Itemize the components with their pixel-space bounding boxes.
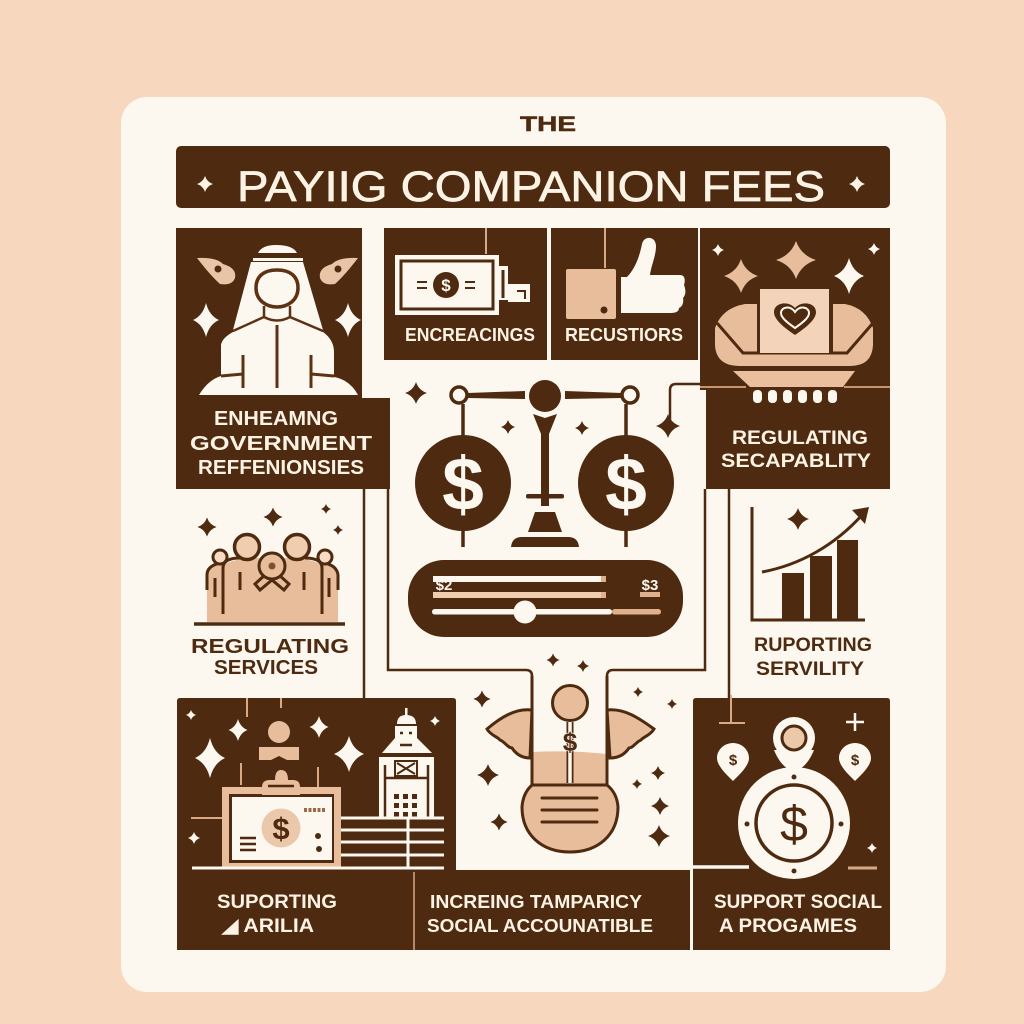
icon: coin target pin: $ bbox=[729, 752, 738, 769]
icon: sparkles above group bbox=[198, 504, 343, 536]
chart: balance scale: $ bbox=[442, 442, 484, 526]
text: regulating label: REGULATING bbox=[732, 428, 868, 449]
chart: balance scale bbox=[415, 380, 674, 547]
icon: government building bbox=[379, 708, 434, 818]
text: support social: SUPPORT SOCIAL bbox=[714, 892, 882, 913]
panel: recustiors bbox=[551, 228, 698, 360]
icon: group of people bbox=[194, 534, 345, 624]
text: supporting: ◢ ARILIA bbox=[221, 916, 314, 937]
text: regulating services: REGULATING bbox=[191, 636, 349, 658]
text: support social bbox=[714, 892, 882, 937]
panel: encreacings bbox=[384, 228, 547, 360]
text: recustiors: RECUSTIORS bbox=[565, 325, 683, 345]
text: ruporting servility: RUPORTING bbox=[754, 635, 872, 656]
icon: sparkles and person bbox=[186, 698, 440, 844]
icon: bill with dollar: $ bbox=[272, 811, 290, 846]
text: regulating services bbox=[191, 636, 349, 679]
title banner: PAYIIG COMPANION FEES bbox=[237, 163, 825, 211]
text: supporting: SUPORTING bbox=[217, 892, 337, 913]
text: government label: GOVERNMENT bbox=[190, 433, 372, 455]
chart: rising bars bbox=[752, 507, 869, 620]
text: transparency label: SOCIAL ACCOUNATIBLE bbox=[427, 916, 653, 936]
text: regulating label bbox=[721, 428, 871, 472]
title banner bbox=[176, 146, 890, 211]
icon: bill with dollar bbox=[222, 770, 341, 868]
icon: winged jar: $ bbox=[563, 727, 578, 757]
text: support social: A PROGAMES bbox=[719, 916, 857, 937]
chart: slider bar: $3 bbox=[642, 577, 658, 594]
panel: government references bbox=[176, 228, 390, 489]
text: ruporting servility: SERVILITY bbox=[756, 659, 864, 680]
panel: bottom right bbox=[693, 695, 890, 950]
icon: banknote: $ bbox=[441, 276, 451, 295]
chart: slider bar: $2 bbox=[436, 577, 452, 594]
text: supporting bbox=[217, 892, 337, 937]
text: government label bbox=[190, 408, 372, 479]
text: ruporting servility bbox=[754, 635, 872, 680]
panel: bottom left supporting bbox=[177, 698, 456, 950]
connector lines bbox=[364, 384, 729, 783]
icon: winged jar bbox=[487, 676, 654, 852]
chart: balance scale: $ bbox=[605, 442, 647, 526]
icon: envelope basket with heart bbox=[700, 289, 890, 403]
icon: sparkles bbox=[712, 241, 880, 294]
icon: thumbs up bbox=[566, 228, 685, 319]
text: regulating label: SECAPABLITY bbox=[721, 451, 871, 472]
icon: coin target pin: $ bbox=[780, 796, 808, 852]
text: government label: ENHEAMNG bbox=[214, 408, 338, 430]
panel: bottom middle bbox=[405, 870, 690, 950]
icon: robed figure bbox=[199, 245, 358, 395]
chart: slider bar bbox=[408, 560, 683, 637]
icon: small sparkles around scale bbox=[405, 382, 680, 438]
text: transparency label: INCREING TAMPARICY bbox=[430, 892, 642, 912]
decorative rule lines bbox=[192, 818, 444, 868]
icon: sparkles around jar bbox=[474, 654, 677, 847]
icon: coin target pin: $ bbox=[851, 752, 860, 769]
icon: coin target pin bbox=[693, 695, 877, 879]
panel: regulating secapability bbox=[700, 228, 890, 489]
panel: main card bbox=[121, 97, 946, 992]
heading: the: THE bbox=[520, 113, 576, 136]
icon: sparkles and ornaments bbox=[193, 258, 361, 337]
text: government label: REFFENIONSIES bbox=[198, 457, 364, 479]
text: regulating services: SERVICES bbox=[214, 657, 318, 679]
text: transparency label bbox=[427, 892, 653, 936]
icon: banknote bbox=[395, 228, 530, 315]
text: encreacings: ENCREACINGS bbox=[405, 325, 535, 345]
